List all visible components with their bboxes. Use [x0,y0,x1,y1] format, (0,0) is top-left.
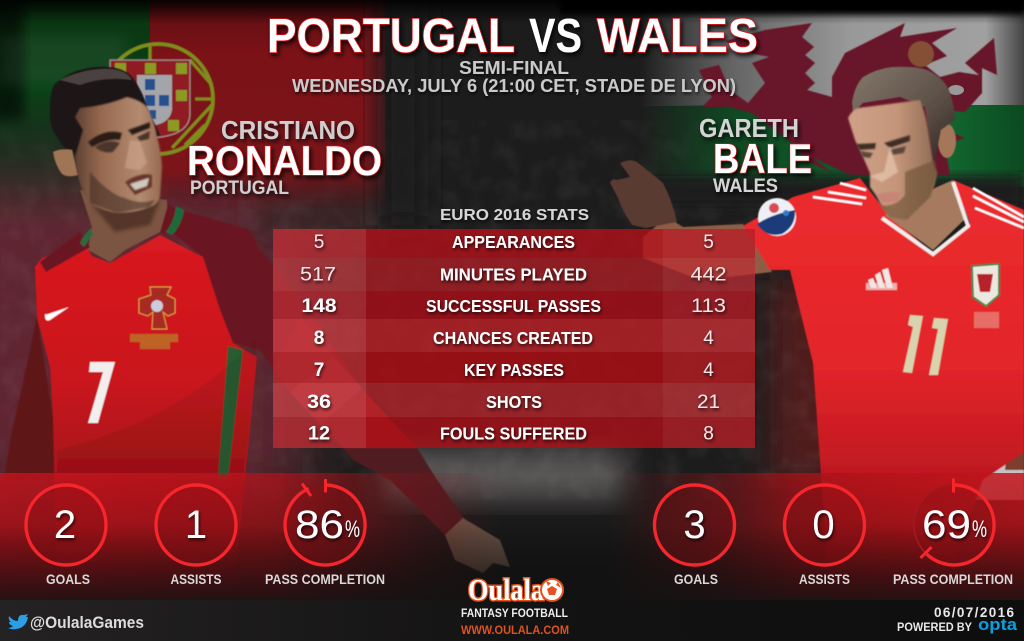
Bale values: 5 [703,232,714,253]
row labels: FOULS SUFFERED [440,424,587,444]
coat of arms [103,44,213,154]
Ronaldo values: 148 [302,296,336,317]
band: Ronaldo tournament stats [26,479,385,587]
icon: adidas logo [866,268,897,290]
goals circle: 2 [54,503,76,547]
Ronaldo values: 7 [314,360,324,381]
Bale values: 113 [691,296,726,317]
goals circle [26,485,106,587]
Ronaldo values: 12 [308,424,330,444]
player name: Ronaldo [187,115,382,199]
match details: WEDNESDAY, JULY 6 (21:00 CET, STADE DE LYON) [292,76,736,96]
pass completion gauge: % [972,516,987,543]
row labels: SUCCESSFUL PASSES [426,296,601,316]
shorts [972,450,1024,500]
date and credits: 06/07/2016 [934,605,1014,620]
date and credits: POWERED BY [897,620,972,634]
title: VS [529,10,582,63]
assists circle: 1 [185,503,207,547]
logo: Oulala Fantasy Football: FANTASY FOOTBALL [461,606,568,620]
player: Gareth Bale [610,41,1024,600]
flag: Portugal [0,0,428,230]
pass completion gauge: % [345,516,360,543]
player name: Bale [699,113,812,197]
pass completion gauge: 86 [295,503,344,547]
player name: Ronaldo: PORTUGAL [190,177,289,199]
Bale values: 21 [697,392,720,413]
player name: Ronaldo: CRISTIANO [221,115,355,145]
forearm [643,217,772,280]
player name: Ronaldo: RONALDO [187,137,382,184]
pass completion gauge [265,479,385,587]
Ronaldo values [300,232,336,444]
match details: SEMI-FINAL [459,58,569,78]
facial features [856,135,937,220]
hair [50,67,160,165]
icon: crest [972,264,999,328]
rows background [273,229,755,448]
player: Cristiano Ronaldo [4,67,510,600]
stats panel [273,207,755,448]
goals circle: GOALS [46,572,90,587]
jersey [743,178,1024,600]
Bale values: 4 [703,328,714,349]
row labels: SHOTS [486,392,542,412]
flag: Wales [560,0,1024,206]
shirt number 11 [903,315,948,375]
pass completion gauge [893,478,1013,587]
Bale values: 4 [703,360,714,381]
armband [290,357,362,425]
title [267,10,758,63]
hand [610,160,677,228]
Bale values: 442 [690,264,726,286]
face [75,97,162,213]
Ronaldo values: 36 [307,392,331,413]
assists circle: ASSISTS [170,572,222,587]
Ronaldo values: 517 [300,264,336,286]
goals circle [654,485,734,587]
hand [445,518,510,573]
collar [882,182,968,254]
goals circle: GOALS [674,572,718,587]
assists circle: ASSISTS [799,572,850,587]
Bale values: 8 [703,424,714,444]
icon: football [541,579,563,601]
pass completion gauge: PASS COMPLETION [893,572,1013,587]
pass completion gauge: PASS COMPLETION [265,572,385,587]
Ronaldo values: 5 [314,232,324,253]
sleeve [156,204,465,535]
icon: dragon [699,23,997,175]
heading: Euro 2016 stats: EURO 2016 STATS [440,207,589,224]
hair bun [908,41,934,67]
title: WALES [597,10,758,63]
shoulder stripes [813,183,1024,228]
face [848,100,937,220]
twitter handle: @OulalaGames [30,614,144,632]
match details [292,58,736,96]
shirt number 7 [88,362,115,423]
goals circle: 3 [683,503,706,547]
row labels: KEY PASSES [464,360,564,380]
ear [938,124,956,158]
far arm [1000,330,1024,470]
icon: crest [130,287,178,349]
assists circle: 0 [812,503,835,547]
icon: euro badge [757,198,796,236]
assists circle [784,485,864,587]
icon: nike swoosh [45,307,69,320]
row labels: MINUTES PLAYED [440,264,587,284]
Ronaldo values: 8 [314,328,324,349]
logo: Oulala Fantasy Football: Oulala [468,572,544,607]
footer bar [0,600,1024,641]
logo: Oulala Fantasy Football [461,572,569,637]
date and credits [897,605,1018,634]
neck [885,180,966,250]
date and credits: opta [978,615,1018,634]
row labels [426,232,601,444]
bottom band shading [0,473,1024,600]
ear [53,149,78,176]
band: Bale tournament stats [654,478,1013,587]
neck [80,190,167,262]
pass completion gauge: 69 [922,503,971,547]
hair [852,67,955,165]
left arm [4,317,58,480]
logo: Oulala Fantasy Football: WWW.OULALA.COM [461,623,569,637]
assists circle [156,485,236,587]
icon: twitter bird [8,614,28,629]
jersey [35,235,257,600]
player name: Bale: WALES [713,175,778,197]
row labels: CHANCES CREATED [433,328,593,348]
Bale values [690,232,726,444]
title: PORTUGAL [267,10,515,63]
facial features [88,122,155,213]
row labels: APPEARANCES [452,232,575,252]
player name: Bale: GARETH [699,113,799,143]
player name: Bale: BALE [713,135,812,182]
